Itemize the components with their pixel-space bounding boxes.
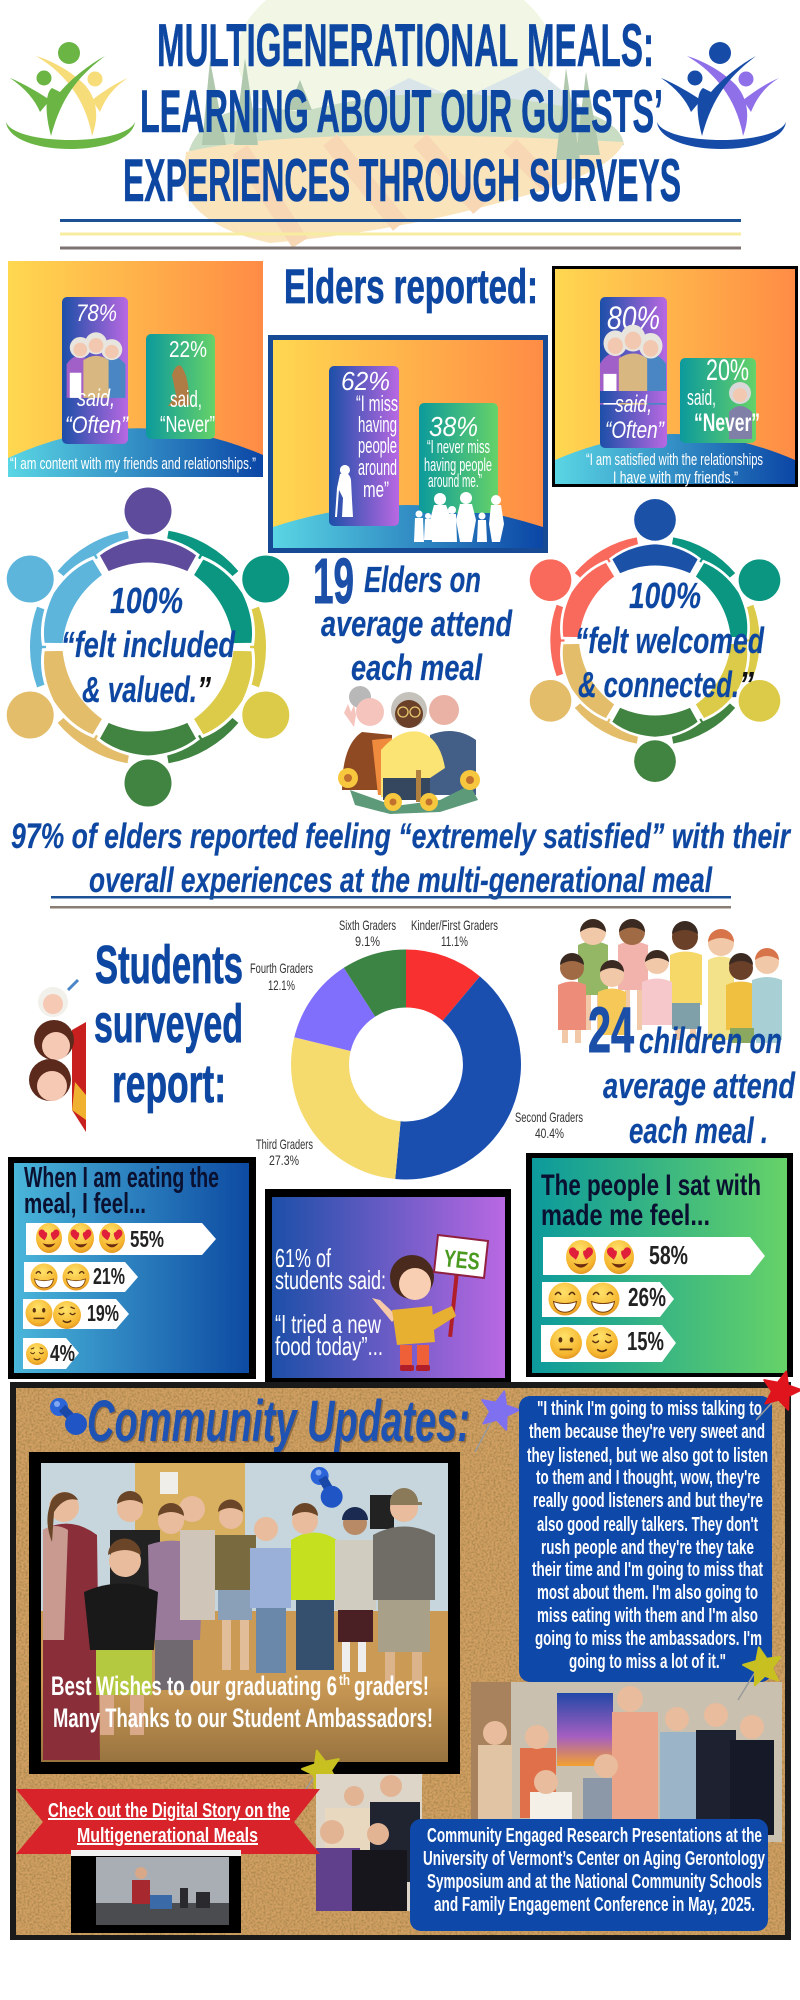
bar: 20% never [680, 354, 760, 443]
bar: 22% never: “Never” [160, 411, 215, 437]
callout: research presentations [410, 1819, 768, 1931]
bar: 38%: “I never miss [427, 437, 490, 457]
title [123, 12, 681, 214]
bar: 15% neutral [541, 1325, 676, 1362]
caption: best wishes: Many Thanks to our Student Ambassadors! [53, 1703, 433, 1733]
icon: grandmother [729, 382, 752, 439]
bar: 62%: “I miss [356, 391, 398, 416]
chart labels: 9.1% [355, 933, 380, 949]
bar: 58% loved: 58% [649, 1240, 688, 1270]
bar: 22% never: said, [170, 386, 202, 412]
heading: community updates: Community Updates: [88, 1390, 472, 1456]
banner: digital story link [16, 1789, 320, 1854]
bar: 62%: me” [363, 477, 389, 502]
chart labels: 11.1% [441, 933, 468, 949]
panel: eating the meal feelings: When I am eating the [24, 1162, 219, 1194]
bar: 20% never: 20% [706, 354, 749, 387]
callout: student quote: going to miss a lot of it." [569, 1651, 726, 1673]
video thumbnail: digital story [71, 1850, 241, 1933]
panel: miss having people around [268, 338, 548, 553]
panel: eating the meal feelings: meal, I feel... [24, 1188, 146, 1220]
heading: students surveyed report [94, 935, 243, 1114]
icon: right logo [657, 42, 786, 149]
heading: students surveyed report: report: [112, 1054, 226, 1114]
text: 100% felt welcomed: ” [739, 664, 754, 705]
panel: tried a new food [265, 1189, 511, 1387]
text: 19 elders on average: Elders on [364, 559, 481, 600]
text: 100% felt included: ” [197, 669, 211, 710]
panel: tried a new food: 61% of [275, 1243, 332, 1273]
bar: 22% never [146, 334, 215, 439]
bar: 62%: 62% [341, 366, 390, 396]
text: 97% extremely satisfied [11, 817, 792, 900]
text: 24 children on average [588, 994, 796, 1151]
bar: 62%: around [358, 455, 397, 480]
text: 100% felt included: 100% [110, 580, 183, 621]
panel: eating the meal feelings [8, 1157, 256, 1379]
icon: yellow star pin [297, 1746, 345, 1802]
bar: 4% calm [23, 1338, 79, 1369]
chart labels: Sixth Graders [339, 917, 396, 933]
chart labels: Third Graders [256, 1136, 313, 1152]
chart labels: 40.4% [535, 1125, 564, 1141]
text: 19 elders on average: 19 [313, 545, 354, 617]
text: 19 elders on average: average attend [321, 603, 513, 644]
text: 24 children on average: 24 [588, 994, 634, 1066]
panel: satisfied with friends: I have with my friends.” [613, 468, 738, 487]
bar: 62%: having [358, 412, 397, 437]
illustration: boy with yes sign [372, 1235, 488, 1371]
bar: 19% neutral: 19% [87, 1300, 119, 1326]
illustration: boy with yes sign: YES [442, 1245, 481, 1276]
photo: student ambassadors [29, 1452, 460, 1774]
panel: people I sat with: made me feel... [541, 1199, 710, 1232]
chart: ring of people, included and valued [0, 488, 311, 806]
panel: content with friends: “I am content with my friends and relationships.” [10, 454, 256, 473]
bar: 22% never: 22% [169, 336, 207, 362]
bar: 15% neutral: 15% [627, 1326, 664, 1356]
heading: students surveyed report: surveyed [94, 994, 243, 1054]
bar: 26% happy [542, 1282, 674, 1317]
chart labels [250, 917, 583, 1168]
caption: best wishes: th [339, 1672, 350, 1689]
heading: community updates: Community Updates: [87, 1389, 470, 1454]
bar: 78% often: 78% [76, 300, 117, 327]
panel: tried a new food: students said: [275, 1265, 386, 1295]
text: 100% felt welcomed: 100% [629, 575, 701, 616]
chart labels: Fourth Graders [250, 960, 313, 976]
bar: 38%: around me.” [428, 471, 482, 491]
bar: 38% [419, 403, 498, 513]
photo: four presenters [316, 1774, 422, 1911]
panel: tried a new food: food today”... [275, 1331, 383, 1361]
bar: 62%: people [358, 433, 397, 458]
panel: satisfied with friends [554, 268, 796, 487]
icon: blue push pin [50, 1398, 87, 1435]
chart labels: 27.3% [269, 1152, 299, 1168]
bar: 4% calm: 4% [50, 1340, 75, 1366]
bar: 21% happy [24, 1262, 138, 1292]
chart labels: 12.1% [268, 977, 295, 993]
bar: 38%: having people [424, 455, 492, 475]
panel: people I sat with [526, 1153, 793, 1377]
banner: digital story link: Multigenerational Meals [77, 1825, 258, 1847]
bar: 19% neutral [23, 1299, 129, 1329]
callout: student quote [519, 1396, 772, 1682]
text: 19 elders on average: each meal [351, 647, 483, 688]
illustration: group of children [558, 919, 782, 1043]
text: 100% felt welcomed [575, 575, 765, 705]
icon: left logo [6, 42, 135, 149]
icon: yellow star on group photo [738, 1643, 785, 1700]
bar: 78% often [62, 297, 129, 444]
bar: 21% happy: 21% [93, 1263, 125, 1289]
chart: grade donut [250, 917, 583, 1180]
bar: 20% never: “Never” [694, 409, 760, 437]
icon: elder silhouette [335, 465, 353, 517]
icon: purple star pin [475, 1387, 523, 1452]
chart labels: Kinder/First Graders [411, 917, 498, 933]
bar: 58% loved [543, 1237, 765, 1275]
text: 100% felt included [61, 580, 236, 710]
panel: content with friends [8, 261, 263, 477]
caption: best wishes: graders! [354, 1671, 429, 1701]
caption: best wishes [51, 1671, 433, 1733]
heading: Elders reported: Elders reported: [284, 261, 538, 314]
bar: 55% loved: 55% [130, 1226, 164, 1252]
bar: 78% often: “Often” [65, 412, 129, 439]
icon: red star pin [756, 1367, 800, 1420]
heading: community updates [87, 1389, 472, 1456]
illustration: peeking children [29, 980, 86, 1132]
bar: 80% often: “Often” [605, 417, 665, 444]
bar: 80% often [600, 297, 667, 448]
illustration: three elders with flowers [338, 686, 480, 814]
caption: best wishes: Best Wishes to our graduating 6 [51, 1671, 337, 1701]
heading: students surveyed report: Students [95, 935, 243, 995]
bar: 26% happy: 26% [628, 1282, 666, 1312]
bar: 62% [329, 366, 399, 526]
banner: digital story link: Check out the Digital Story on the [48, 1800, 290, 1822]
icon: blue pin on photo [304, 1465, 349, 1510]
photo: conference group [471, 1682, 782, 1842]
chart: ring of people, welcomed and connected [510, 499, 800, 782]
icon: family silhouette [414, 492, 504, 542]
text: 100% felt welcomed: & connected. [578, 664, 739, 705]
bar: 80% often: 80% [607, 300, 660, 336]
bar: 38%: 38% [429, 411, 478, 442]
bar: 80% often: said, [615, 391, 652, 418]
bar: 55% loved [26, 1223, 216, 1255]
text: 100% felt included: & valued. [82, 669, 197, 710]
text: 19 elders on average [313, 545, 513, 688]
bar: 20% never: said, [687, 385, 716, 410]
chart labels: Second Graders [515, 1109, 583, 1125]
panel: tried a new food: “I tried a new [275, 1309, 381, 1339]
text: 100% felt included: “felt included [61, 624, 236, 665]
background landscape illustration [182, 0, 624, 243]
bar: 78% often: said, [77, 385, 115, 412]
panel: community updates corkboard [10, 1367, 800, 1940]
